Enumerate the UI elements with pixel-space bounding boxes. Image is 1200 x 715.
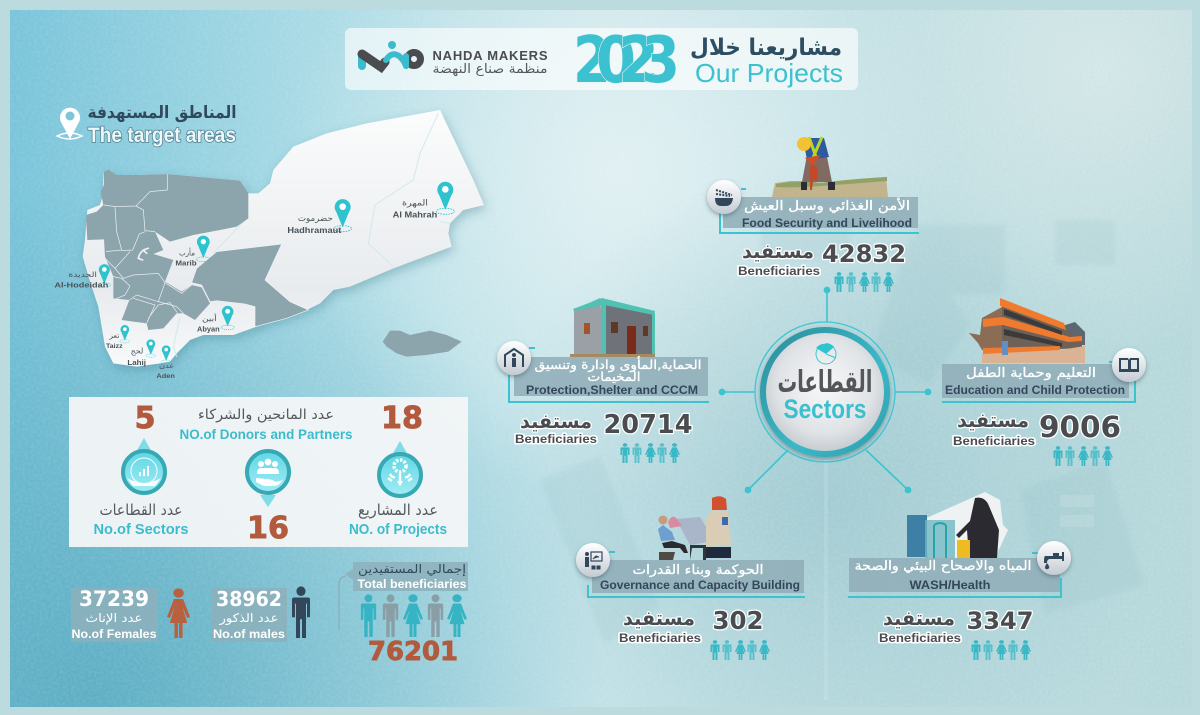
label: education: التعليم وحماية الطفل <box>966 366 1096 381</box>
icon: open book <box>1109 348 1146 382</box>
map: Marib marker: مأرب <box>179 247 195 257</box>
map: Marib marker <box>175 236 211 268</box>
figure: governance beneficiaries: مستفيد <box>623 606 695 630</box>
organisation name: منظمة صناع النهضة <box>432 62 548 77</box>
card: males: No.of males <box>213 627 285 641</box>
card: females <box>71 587 158 642</box>
card: males: عدد الذكور <box>218 611 278 626</box>
organisation name: NAHDA MAKERS <box>432 48 548 63</box>
photo: woman at water point <box>907 492 1008 558</box>
title arabic: مشاريعنا خلال <box>690 35 842 61</box>
hub: sectors: القطاعات <box>778 365 872 400</box>
sector: governance <box>576 496 805 660</box>
photo: school building <box>969 298 1085 363</box>
map: Taizz marker <box>106 325 130 350</box>
year 2023: 2 <box>573 24 611 98</box>
figure: protection beneficiaries: مستفيد <box>520 409 592 433</box>
stat: donors and partners heading: NO.of Donors and Partners <box>180 426 353 442</box>
figure: food security beneficiaries: مستفيد <box>742 239 814 263</box>
map: Al Mahrah marker: المهرة <box>402 197 428 207</box>
figure: education beneficiaries <box>953 408 1121 466</box>
figure: governance beneficiaries: Beneficiaries <box>619 633 701 645</box>
map: western governorates <box>86 169 248 330</box>
logo: Nahda Makers mark <box>362 41 420 67</box>
map: Al Mahrah marker <box>393 182 454 220</box>
label: governance: Governance and Capacity Building <box>600 578 800 592</box>
stat: sectors: 5 <box>135 401 155 436</box>
callout: total beneficiaries: Total beneficiaries <box>358 577 467 591</box>
map: Al Mahrah marker: Al Mahrah <box>393 210 437 220</box>
stat: sectors: عدد القطاعات <box>100 501 182 519</box>
map: Taizz marker: تعز <box>108 332 119 340</box>
icon: food bowl <box>707 180 746 214</box>
sector: protection and shelter <box>497 298 709 463</box>
stat: donors icon and number <box>247 451 289 546</box>
label: protection and shelter: Protection,Shelter and CCCM <box>526 383 698 397</box>
photo: training meeting <box>658 496 731 560</box>
icon: pie chart <box>816 343 836 364</box>
icon: female <box>167 588 190 638</box>
figure: governance beneficiaries: 302 <box>712 606 764 635</box>
connectors from hub <box>719 287 931 493</box>
panel: key statistics <box>69 397 468 547</box>
figure: education beneficiaries: 9006 <box>1039 410 1121 444</box>
stat: projects: 18 <box>381 401 423 436</box>
year 2023: 2 <box>618 24 659 98</box>
card: females: 37239 <box>79 587 149 611</box>
map: Abyan marker <box>197 306 234 333</box>
stat: sectors: No.of Sectors <box>94 521 188 538</box>
stat: donors and partners heading <box>180 407 353 442</box>
label: protection and shelter <box>509 356 709 402</box>
icon: shelter <box>497 341 535 375</box>
title english: Our Projects <box>695 58 843 88</box>
map: Hadhramaut marker: حضرموت <box>298 213 333 223</box>
figure: food security beneficiaries: Beneficiaries <box>738 266 820 278</box>
map: Shabwa block <box>192 244 308 327</box>
label: food security <box>720 197 919 233</box>
total beneficiaries number: 76201 <box>368 637 458 667</box>
label: food security: Food Security and Livelihood <box>742 216 912 230</box>
figure: governance beneficiaries <box>619 606 770 660</box>
figure: education beneficiaries: Beneficiaries <box>953 436 1035 448</box>
callout: total beneficiaries <box>339 562 468 630</box>
map: Abyan marker: Abyan <box>197 324 220 333</box>
label: governance: الحوكمة وبناء القدرات <box>632 563 764 578</box>
label: education: Education and Child Protection <box>945 383 1125 397</box>
hub: sectors <box>755 322 895 462</box>
label: education <box>942 364 1135 402</box>
figure: WASH beneficiaries: مستفيد <box>883 606 955 630</box>
header banner <box>345 24 858 98</box>
callout: total beneficiaries: إجمالي المستفيدين <box>358 562 466 577</box>
photo: shelter house <box>570 298 655 357</box>
map: Aden marker <box>156 345 175 380</box>
hub: sectors: Sectors <box>784 394 866 424</box>
stat: donors and partners heading: عدد المانحين والشركاء <box>198 407 334 423</box>
sector: WASH and health <box>848 492 1071 660</box>
map of Yemen <box>54 110 484 380</box>
figure: WASH beneficiaries: Beneficiaries <box>879 633 961 645</box>
map: Socotra island <box>383 331 462 357</box>
map: Lahj marker <box>127 339 156 367</box>
year 2023: 3 <box>641 24 680 98</box>
stat: sectors <box>94 401 188 538</box>
figure: protection beneficiaries: 20714 <box>604 410 692 440</box>
heading: target areas: المناطق المستهدفة <box>88 103 236 123</box>
figure: food security beneficiaries <box>738 239 906 292</box>
organisation name <box>432 48 548 77</box>
map: Marib marker: Marib <box>175 259 197 268</box>
year 2023 <box>573 24 680 98</box>
icon: male <box>292 586 310 638</box>
icon: target areas pin <box>57 108 82 139</box>
photo: worker with drill <box>772 137 888 197</box>
figure: WASH beneficiaries <box>879 606 1034 660</box>
figure: protection beneficiaries <box>515 409 692 463</box>
map: Lahj marker: لحج <box>131 346 143 355</box>
map: Taizz marker: Taizz <box>106 343 123 350</box>
icon: water tap <box>1032 541 1071 575</box>
card: males: 38962 <box>216 587 282 611</box>
stat: projects: NO. of Projects <box>349 521 447 538</box>
figure: WASH beneficiaries: 3347 <box>966 607 1034 635</box>
sector: education <box>942 298 1146 466</box>
heading: target areas <box>88 103 236 147</box>
map: Al-Hodeidah marker: Al-Hodeidah <box>54 280 109 289</box>
label: governance <box>588 560 805 597</box>
figure: protection beneficiaries: Beneficiaries <box>515 434 597 446</box>
icon: presentation board <box>576 543 615 577</box>
map: Lahj marker: Lahij <box>127 358 146 367</box>
map: Hadhramaut marker <box>287 199 352 235</box>
card: females: No.of Females <box>72 627 157 641</box>
map: Aden marker: عدن <box>159 362 174 370</box>
label: WASH <box>848 558 1061 597</box>
map: Al-Hodeidah marker <box>54 264 111 289</box>
card: males <box>211 587 287 642</box>
figure: food security beneficiaries: 42832 <box>822 240 906 268</box>
label: WASH: WASH/Health <box>910 578 990 592</box>
map: Hadhramaut marker: Hadhramaut <box>287 225 342 235</box>
stat: projects: عدد المشاريع <box>358 501 438 519</box>
heading: target areas: The target areas <box>88 124 236 147</box>
label: food security: الأمن الغذائي وسبل العيش <box>744 197 910 214</box>
year 2023: 0 <box>596 24 636 98</box>
figure: education beneficiaries: مستفيد <box>957 408 1029 432</box>
map: Al-Hodeidah marker: الحديدة <box>68 270 97 279</box>
stat: projects <box>349 401 447 538</box>
label: protection and shelter: الحماية,المأوى وادارة وتنسيق <box>534 356 702 373</box>
map: Aden marker: Aden <box>156 373 175 380</box>
label: WASH: المياه والاصحاح البيئي والصحة <box>854 559 1032 574</box>
card: females: عدد الإناث <box>86 611 142 625</box>
people: total beneficiaries icons <box>361 594 467 637</box>
sector: food security <box>707 137 919 292</box>
map: Abyan marker: أبين <box>202 313 217 323</box>
label: protection and shelter: المخيمات <box>588 369 640 384</box>
stat: donors icon and number: 16 <box>247 511 289 546</box>
